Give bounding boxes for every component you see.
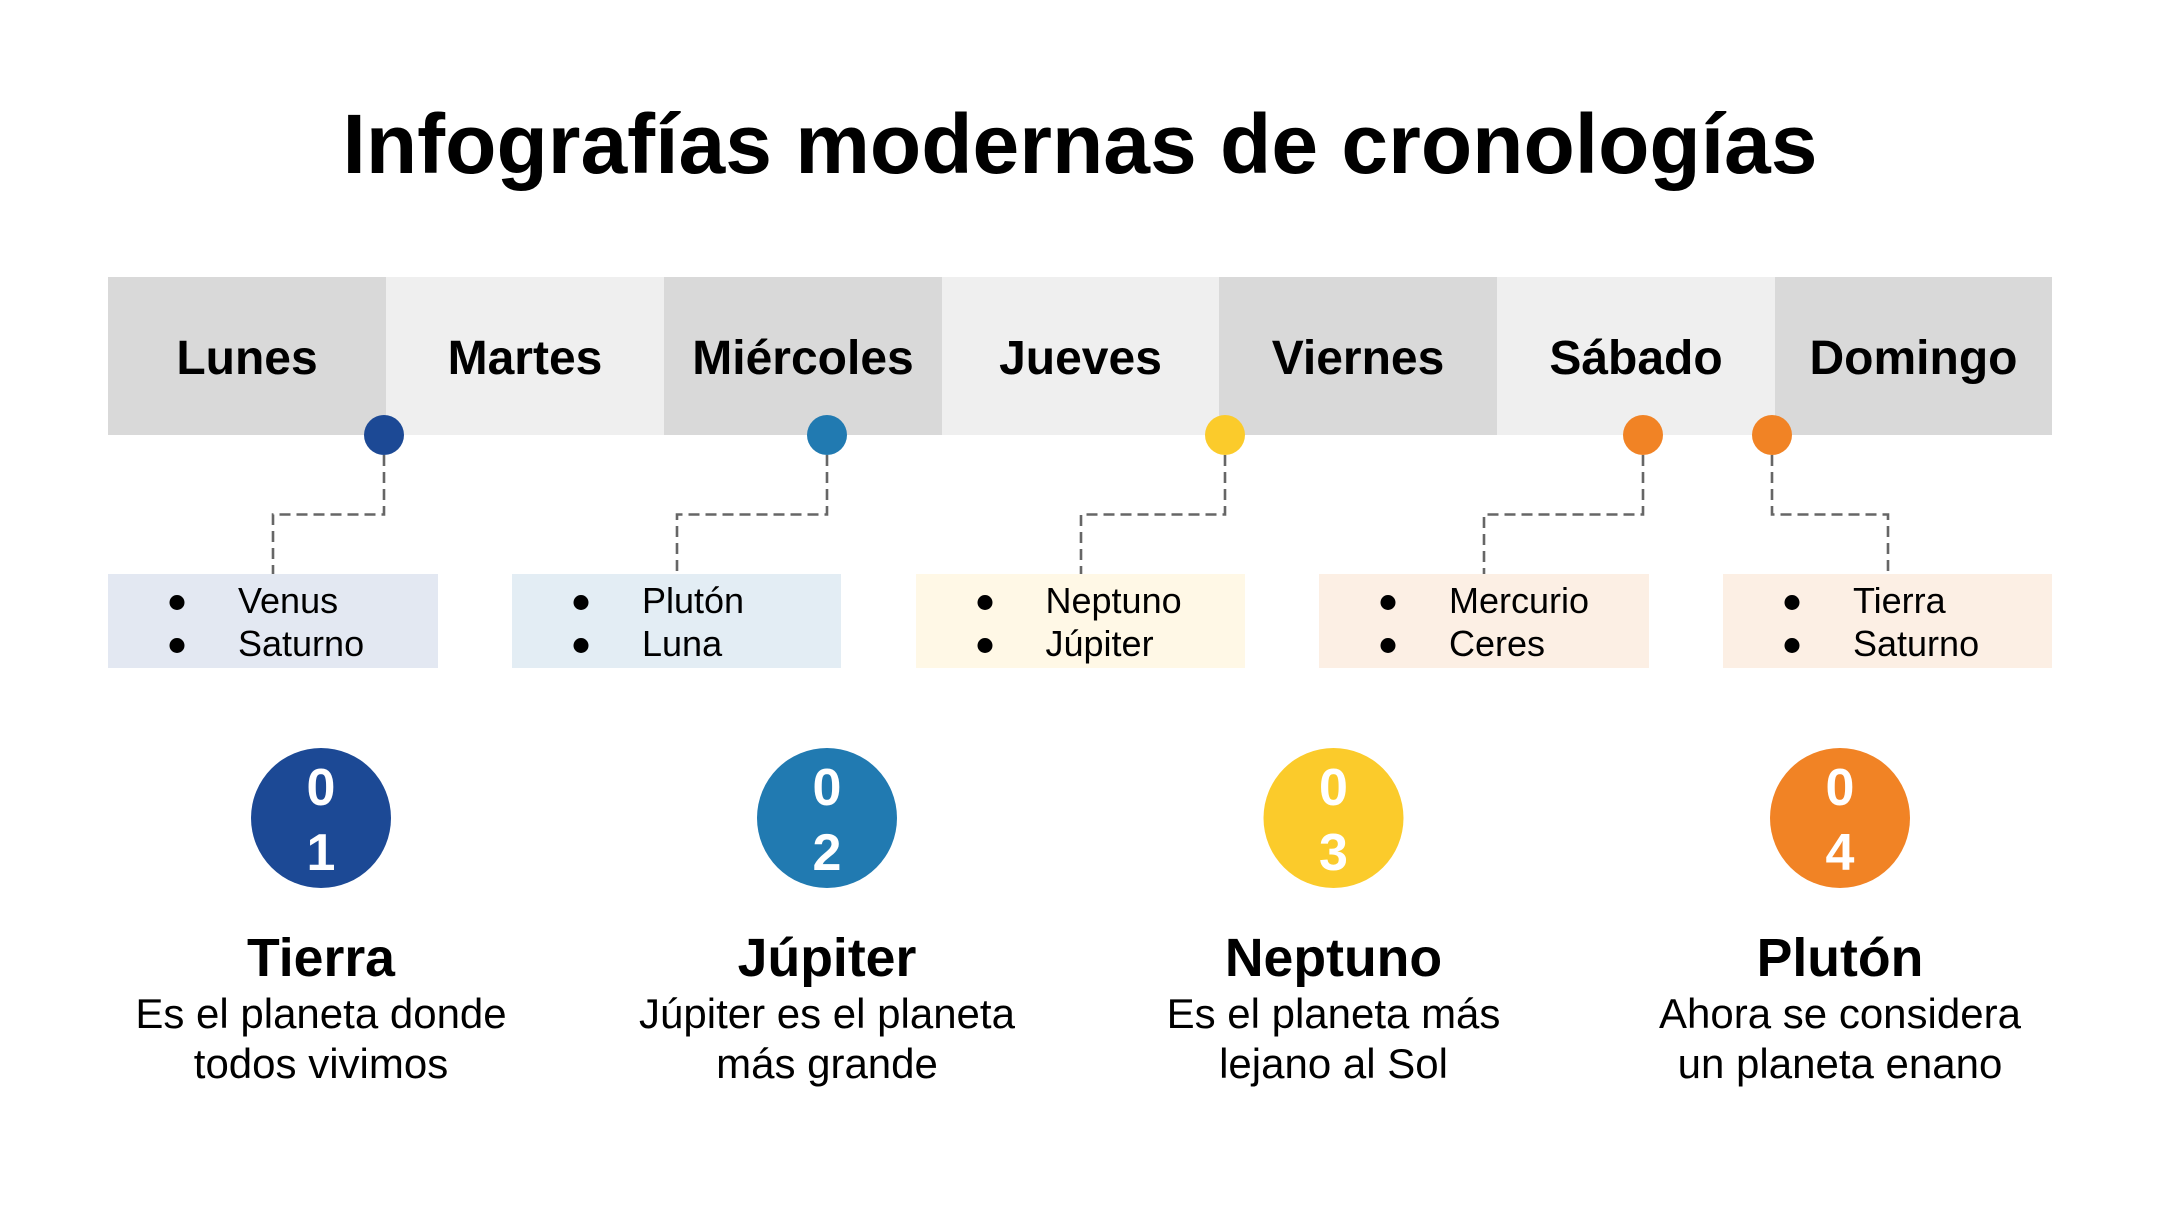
day: Sábado: [1497, 277, 1775, 435]
day: Domingo: Domingo: [1810, 332, 2017, 385]
marker dot: teal blue: [807, 415, 847, 455]
text block: Júpiter: [639, 928, 1016, 1087]
list box: Mercurio, Ceres: Mercurio: [1449, 580, 1589, 621]
list box: Neptuno, Júpiter: Neptuno: [1046, 580, 1182, 621]
text block: Júpiter: Júpiter es el planeta: [639, 990, 1016, 1037]
day: Domingo: [1775, 277, 2052, 435]
list box: Plutón, Luna: Plutón: [642, 580, 744, 621]
connector: Viernes to Neptuno/Júpiter: [1081, 455, 1225, 574]
day: Miércoles: [664, 277, 942, 435]
text block: Júpiter: más grande: [716, 1040, 938, 1087]
marker dot: orange: [1623, 415, 1663, 455]
text block: Tierra: [135, 928, 507, 1087]
day: Jueves: [942, 277, 1219, 435]
text block: Neptuno: [1167, 928, 1500, 1087]
text block: Plutón: Ahora se considera: [1659, 990, 2022, 1037]
text block: Neptuno: lejano al Sol: [1219, 1040, 1448, 1087]
list box: Venus, Saturno: Venus: [238, 580, 338, 621]
number badge 04: 4: [1826, 824, 1855, 882]
list box: Venus, Saturno: [108, 574, 438, 668]
text block: Plutón: Plutón: [1757, 928, 1923, 988]
text block: Neptuno: Neptuno: [1225, 928, 1442, 988]
text block: Neptuno: Es el planeta más: [1167, 990, 1500, 1037]
marker dot: yellow: [1205, 415, 1245, 455]
text block: Júpiter: Júpiter: [738, 928, 916, 988]
connector: Sábado to Mercurio/Ceres: [1484, 455, 1643, 574]
number badge 01: 1: [307, 824, 335, 882]
list box: Tierra, Saturno: Saturno: [1853, 623, 1979, 664]
number badge 04: 0: [1826, 759, 1854, 817]
connector: Domingo to Tierra/Saturno: [1772, 455, 1888, 574]
number badge 03: [1264, 748, 1404, 888]
list box: Tierra, Saturno: Tierra: [1853, 580, 1947, 621]
list box: Mercurio, Ceres: Ceres: [1449, 623, 1545, 664]
day: Viernes: Viernes: [1272, 332, 1444, 385]
timeline: days of the week: [108, 277, 2052, 435]
title: Infografías modernas de cronologías: [343, 97, 1817, 191]
number badge 01: [251, 748, 391, 888]
number badge 04: [1770, 748, 1910, 888]
list box: Neptuno, Júpiter: [916, 574, 1245, 668]
day: Jueves: Jueves: [999, 332, 1162, 385]
day: Viernes: [1219, 277, 1497, 435]
number badge 01: 0: [307, 759, 335, 817]
number badge 02: 0: [813, 759, 841, 817]
number badge 03: 3: [1319, 824, 1348, 882]
day: Sábado: Sábado: [1549, 332, 1723, 385]
list box: Plutón, Luna: Luna: [642, 623, 723, 664]
text block: Plutón: [1659, 928, 2022, 1087]
marker dot: blue: [364, 415, 404, 455]
day: Lunes: [108, 277, 386, 435]
connector: Lunes to Venus/Saturno: [273, 455, 384, 574]
list box: Neptuno, Júpiter: Júpiter: [1046, 623, 1154, 664]
number badge 02: 2: [813, 824, 841, 882]
text block: Tierra: Es el planeta donde: [135, 990, 507, 1037]
list box: Venus, Saturno: Saturno: [238, 623, 364, 664]
text block: Tierra: todos vivimos: [194, 1040, 448, 1087]
day: Martes: [386, 277, 664, 435]
number badge 03: 0: [1319, 759, 1348, 817]
connector: Miércoles to Plutón/Luna: [677, 455, 827, 574]
marker dot: orange second: [1752, 415, 1792, 455]
text block: Plutón: un planeta enano: [1678, 1040, 2002, 1087]
day: Lunes: Lunes: [176, 332, 318, 385]
list box: Mercurio, Ceres: [1319, 574, 1649, 668]
list box: Tierra, Saturno: [1723, 574, 2052, 668]
day: Miércoles: Miércoles: [692, 332, 914, 385]
list box: Plutón, Luna: [512, 574, 841, 668]
day: Martes: Martes: [448, 332, 602, 385]
number badge 02: [757, 748, 897, 888]
text block: Tierra: Tierra: [247, 928, 396, 988]
